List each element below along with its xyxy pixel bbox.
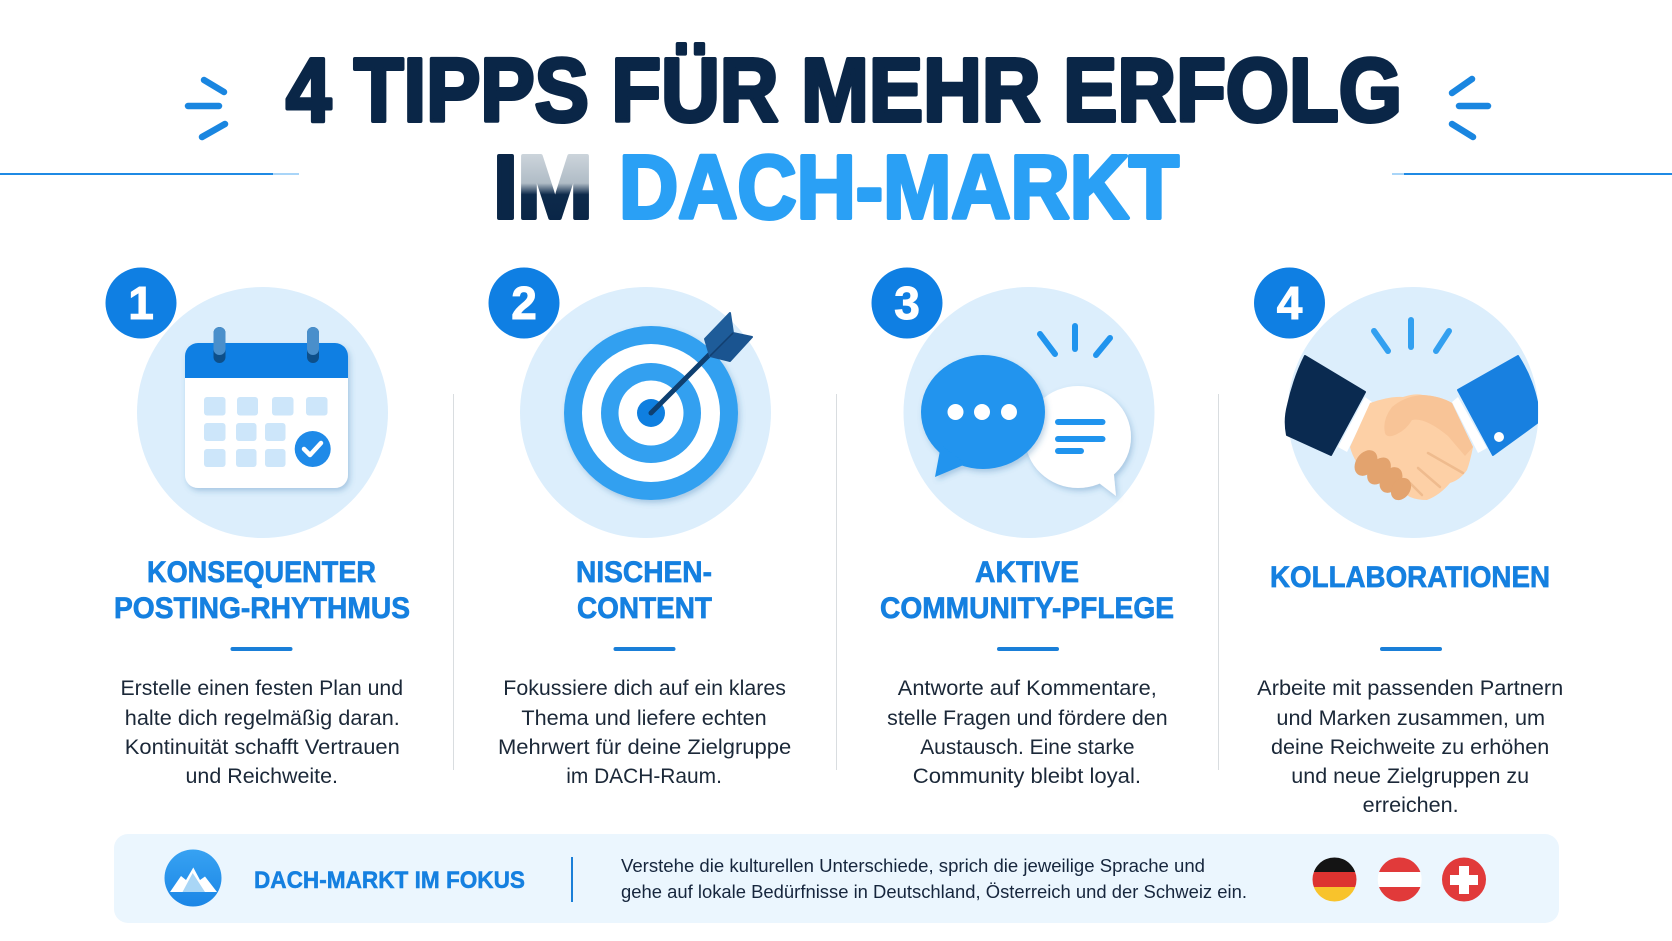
heading: tip 2: CONTENT	[577, 592, 712, 625]
text: tip 1	[120, 677, 403, 788]
text: tip 3: Antworte auf Kommentare,	[898, 677, 1157, 700]
text: tip 1: Kontinuität schafft Vertrauen	[125, 736, 400, 759]
title: DACH-MARKT	[619, 138, 1179, 238]
text: tip 3	[887, 677, 1168, 788]
number badge 3	[872, 268, 942, 338]
text: tip 3: stelle Fragen und fördere den	[887, 707, 1168, 730]
panel: tip 3	[872, 268, 1174, 788]
heading: tip 1: KONSEQUENTER	[147, 556, 376, 589]
icon: target with arrow	[520, 287, 771, 538]
panel: tip 1	[106, 268, 410, 788]
panel: DACH-Markt im Fokus	[114, 834, 1559, 923]
text: focus description: Verstehe die kulturellen Unterschiede, sprich die jeweilige Sprache und	[621, 855, 1205, 876]
text: tip 2: Mehrwert für deine Zielgruppe	[498, 736, 791, 759]
right header rule	[1392, 173, 1672, 175]
text: tip 1: Erstelle einen festen Plan und	[120, 677, 403, 700]
heading: tip 3: COMMUNITY-PFLEGE	[880, 592, 1174, 625]
text: tip 1: halte dich regelmäßig daran.	[125, 707, 400, 730]
icon: flag Austria	[1377, 857, 1422, 902]
title: I	[493, 138, 518, 238]
icon: chat bubbles	[904, 287, 1154, 538]
icon: mountains	[164, 850, 222, 906]
icon: flag Germany	[1312, 857, 1357, 902]
heading: tip 3	[880, 556, 1174, 625]
text: focus description	[621, 855, 1247, 902]
text: tip 4	[1257, 677, 1563, 817]
heading: tip 2	[576, 556, 712, 625]
text: tip 3: Community bleibt loyal.	[913, 765, 1141, 788]
heading: tip 4: KOLLABORATIONEN	[1270, 561, 1550, 594]
title: 4 TIPPS FÜR MEHR ERFOLG	[286, 41, 1402, 141]
text: tip 2: im DACH-Raum.	[566, 765, 722, 788]
accent bar 1	[230, 647, 292, 651]
text: tip 1: und Reichweite.	[186, 765, 338, 788]
title	[286, 41, 1402, 238]
text: tip 4: Arbeite mit passenden Partnern	[1257, 677, 1563, 700]
number badge 1: 1	[128, 277, 154, 329]
panel: tip 4	[1254, 268, 1563, 817]
icon: flag Switzerland	[1441, 857, 1487, 903]
text: tip 4: und Marken zusammen, um	[1276, 707, 1545, 730]
heading: tip 2: NISCHEN-	[576, 556, 712, 589]
icon: left sparks	[188, 80, 225, 137]
text: tip 4: deine Reichweite zu erhöhen	[1271, 736, 1549, 759]
number badge 1	[106, 268, 176, 338]
heading: tip 1	[114, 556, 410, 625]
label: DACH-Markt im Fokus: DACH-MARKT IM FOKUS	[254, 867, 525, 894]
number badge 2	[488, 268, 560, 338]
icon: handshake	[1286, 287, 1538, 538]
accent bar 3	[997, 647, 1059, 651]
text: tip 4: erreichen.	[1363, 794, 1459, 817]
heading: tip 3: AKTIVE	[975, 556, 1079, 589]
text: tip 2: Fokussiere dich auf ein klares	[503, 677, 786, 700]
number badge 4: 4	[1277, 277, 1303, 329]
icon: right sparks	[1452, 79, 1488, 137]
number badge 3: 3	[894, 277, 920, 329]
text: tip 2: Thema und liefere echten	[521, 707, 767, 730]
number badge 2: 2	[511, 277, 537, 329]
left header rule	[0, 173, 299, 175]
text: focus description: gehe auf lokale Bedürfnisse in Deutschland, Österreich und der Schweiz ein.	[621, 881, 1247, 902]
title: M	[517, 138, 593, 238]
accent bar 2	[614, 647, 676, 651]
heading: tip 1: POSTING-RHYTHMUS	[114, 592, 410, 625]
panel: tip 2	[488, 268, 791, 788]
text: tip 2	[498, 677, 791, 788]
text: tip 3: Austausch. Eine starke	[920, 736, 1134, 759]
accent bar 4	[1380, 647, 1442, 651]
icon: calendar	[137, 287, 388, 538]
number badge 4	[1254, 268, 1325, 338]
text: tip 4: und neue Zielgruppen zu	[1291, 765, 1529, 788]
